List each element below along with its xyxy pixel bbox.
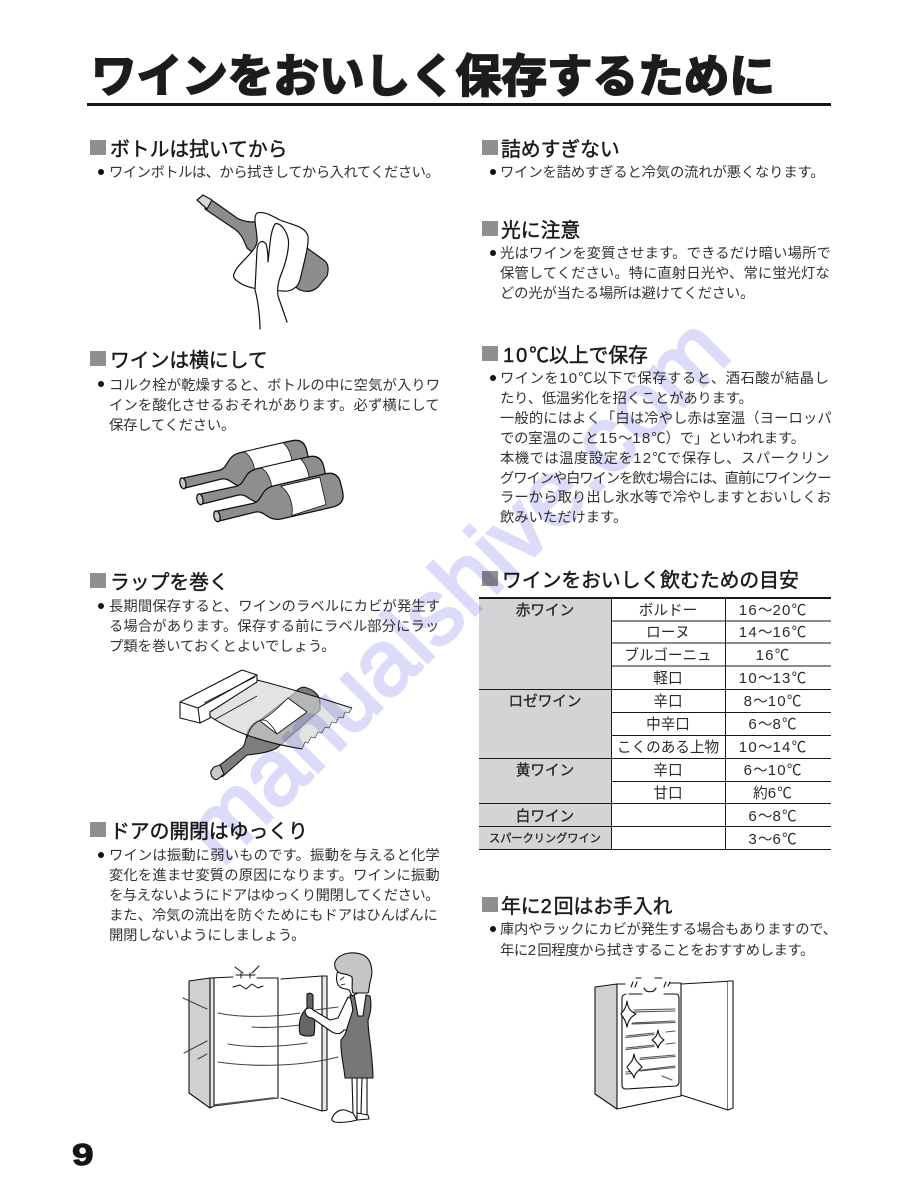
text: above 10C: 飲みいただけます。 (500, 506, 627, 527)
text: light: どの光が当たる場所は避けてください。 (500, 282, 754, 303)
text: lay flat (109, 374, 440, 435)
table: drinking temperatures: 3～6℃ (748, 828, 797, 849)
heading square: door (90, 822, 106, 837)
closing door burst marks (233, 966, 263, 989)
text: twice a year: 庫内やラックにカビが発生する場合もありますので、 (500, 918, 837, 939)
text: door (109, 844, 440, 945)
text: above 10C: たり、低温劣化を招くことがあります。 (500, 387, 753, 408)
text: do not overfill: ワインを詰めすぎると冷気の流れが悪くなります。 (500, 161, 824, 182)
bullet (98, 603, 104, 609)
table: drinking temperatures: こくのある上物 (617, 736, 719, 757)
heading: drinking guide: ワインをおいしく飲むための目安 (502, 564, 799, 593)
table: drinking temperatures: 辛口 (653, 690, 683, 711)
title: ワインをおいしく保存するために (91, 40, 775, 106)
text: door: 開閉しないようにしましょう。 (109, 924, 305, 945)
heading square: do not overfill (482, 140, 498, 155)
bullet (490, 250, 496, 256)
table: drinking temperatures: 6～8℃ (748, 805, 797, 826)
wine type column shading (479, 598, 611, 849)
film (199, 680, 352, 749)
table: drinking temperatures: 白ワイン (516, 805, 574, 826)
heading: door: ドアの開閉はゆっくり (110, 815, 308, 844)
heading: wipe bottle: ボトルは拭いてから (110, 133, 287, 162)
heading square: light (482, 221, 498, 236)
heading square: above 10C (482, 346, 498, 361)
text: above 10C: での室温のこと15～18℃）で」といわれます。 (500, 427, 805, 448)
table: drinking temperatures: 10～13℃ (739, 667, 806, 688)
text: wrap: る場合があります。保存する前にラベル部分にラッ (109, 615, 439, 636)
table: drinking temperatures: 10～14℃ (739, 736, 806, 757)
arm (305, 997, 354, 1034)
shoes (357, 1113, 369, 1120)
heading: light: 光に注意 (501, 214, 580, 243)
sparkles (621, 1001, 636, 1027)
text: door: また、冷気の流出を防ぐためにもドアはひんぱんに (109, 904, 438, 925)
shine marks (631, 978, 670, 992)
table: drinking temperatures: 黄ワイン (516, 759, 574, 780)
table: drinking temperatures: 中辛口 (646, 713, 690, 734)
heading: wrap: ラップを巻く (110, 566, 229, 595)
table: drinking temperatures: 16℃ (756, 644, 789, 665)
text: twice a year: 年に2回程度から拭きすることをおすすめします。 (500, 939, 814, 960)
icon: three bottles lying flat (176, 438, 345, 534)
text: lay flat: コルク栓が乾燥すると、ボトルの中に空気が入りワ (109, 374, 440, 395)
text: wrap (109, 595, 440, 656)
door (281, 976, 322, 1111)
table lines (479, 597, 831, 850)
bottle 2 (193, 454, 328, 517)
table: drinking temperatures: 軽口 (653, 667, 683, 688)
legs (352, 1078, 367, 1118)
bottle held (299, 993, 315, 1036)
bullet (98, 852, 104, 858)
bullet (490, 375, 496, 381)
text: light: 保管してください。特に直射日光や、常に蛍光灯な (500, 262, 830, 283)
table: drinking temperatures: 14～16℃ (739, 621, 806, 642)
table: drinking temperatures: ブルゴーニュ (624, 644, 712, 665)
text: light: 光はワインを変質させます。できるだけ暗い場所で (500, 242, 831, 263)
heading: twice a year: 年に2回はお手入れ (501, 890, 672, 919)
text: above 10C: ラーから取り出し氷水等で冷やしますとおいしくお (500, 486, 831, 507)
text: light (500, 242, 831, 303)
bottle 1 (176, 438, 311, 501)
bullet (98, 381, 104, 387)
table: drinking temperatures (479, 597, 831, 850)
bottle 3 (210, 471, 345, 534)
table: drinking temperatures: 約6℃ (753, 782, 792, 803)
text: door: ワインは振動に弱いものです。振動を与えると化学 (109, 844, 440, 865)
watermark: manualshive.com (163, 297, 748, 882)
bullet (490, 926, 496, 932)
text: above 10C: グワインや白ワインを飲む場合には、直前にワインクー (500, 467, 830, 488)
icon: wrapping bottle label with film (180, 670, 352, 779)
heading square: wrap (90, 573, 106, 588)
row labels: wine types: 赤ワイン (516, 599, 574, 620)
page number: 9 (72, 1137, 94, 1172)
heading square: wipe bottle (90, 140, 106, 155)
text: door: を与えないようにドアはゆっくり開閉してください。 (109, 884, 439, 905)
heading: above 10C: 10℃以上で保存 (503, 339, 648, 368)
bullet (98, 169, 104, 175)
film box (180, 670, 257, 723)
row cells: styles and temperatures: ボルドー (639, 599, 697, 620)
table: drinking temperatures: 6～10℃ (744, 759, 801, 780)
bullet (490, 169, 496, 175)
dress (341, 994, 373, 1078)
text: above 10C (500, 367, 832, 527)
text: above 10C: ワインを10℃以下で保存すると、酒石酸が結晶し (500, 367, 829, 388)
table: drinking temperatures: 甘口 (653, 782, 683, 803)
table: drinking temperatures: ローヌ (646, 621, 690, 642)
text: lay flat: インを酸化させるおそれがあります。必ず横にして (109, 394, 440, 415)
table: drinking temperatures: ロゼワイン (508, 690, 581, 711)
icon: clean wine cooler interior with sparkles (595, 978, 733, 1110)
text: wrap: プ類を巻いておくとよいでしょう。 (109, 635, 336, 656)
racks (632, 1009, 675, 1024)
icon: woman opening door slowly (183, 953, 373, 1122)
table: drinking temperatures: スパークリングワイン (489, 830, 601, 846)
heading square: twice a year (482, 897, 498, 912)
table: drinking temperatures: 16～20℃ (739, 599, 806, 620)
text: twice a year (500, 918, 837, 960)
hair (335, 953, 372, 993)
text: above 10C: 一般的にはよく「白は冷やし赤は室温（ヨーロッパ (500, 407, 832, 428)
text: door: 変化を進ませ変質の原因になります。ワインに振動 (109, 864, 440, 885)
bottle (220, 687, 320, 777)
label (260, 698, 307, 734)
text: wrap: 長期間保存すると、ワインのラベルにカビが発生す (109, 595, 440, 616)
text: above 10C: 本機では温度設定を12℃で保存し、スパークリン (500, 447, 830, 468)
icon: hand wiping bottle with cloth (197, 195, 328, 330)
text: lay flat: 保存してください。 (109, 414, 235, 435)
face (336, 970, 360, 996)
title rule (87, 103, 831, 106)
table: drinking temperatures: 辛口 (653, 759, 683, 780)
table: drinking temperatures: 8～10℃ (744, 690, 801, 711)
heading square: lay flat (90, 351, 106, 366)
heading: lay flat: ワインは横にして (110, 344, 268, 373)
heading square: drinking guide (482, 571, 498, 586)
motion lines (183, 998, 338, 1065)
cabinet (189, 978, 210, 1108)
heading: do not overfill: 詰めすぎない (501, 133, 620, 162)
text: wipe bottle: ワインボトルは、から拭きしてから入れてください。 (109, 161, 439, 182)
table: drinking temperatures: 6～8℃ (748, 713, 797, 734)
